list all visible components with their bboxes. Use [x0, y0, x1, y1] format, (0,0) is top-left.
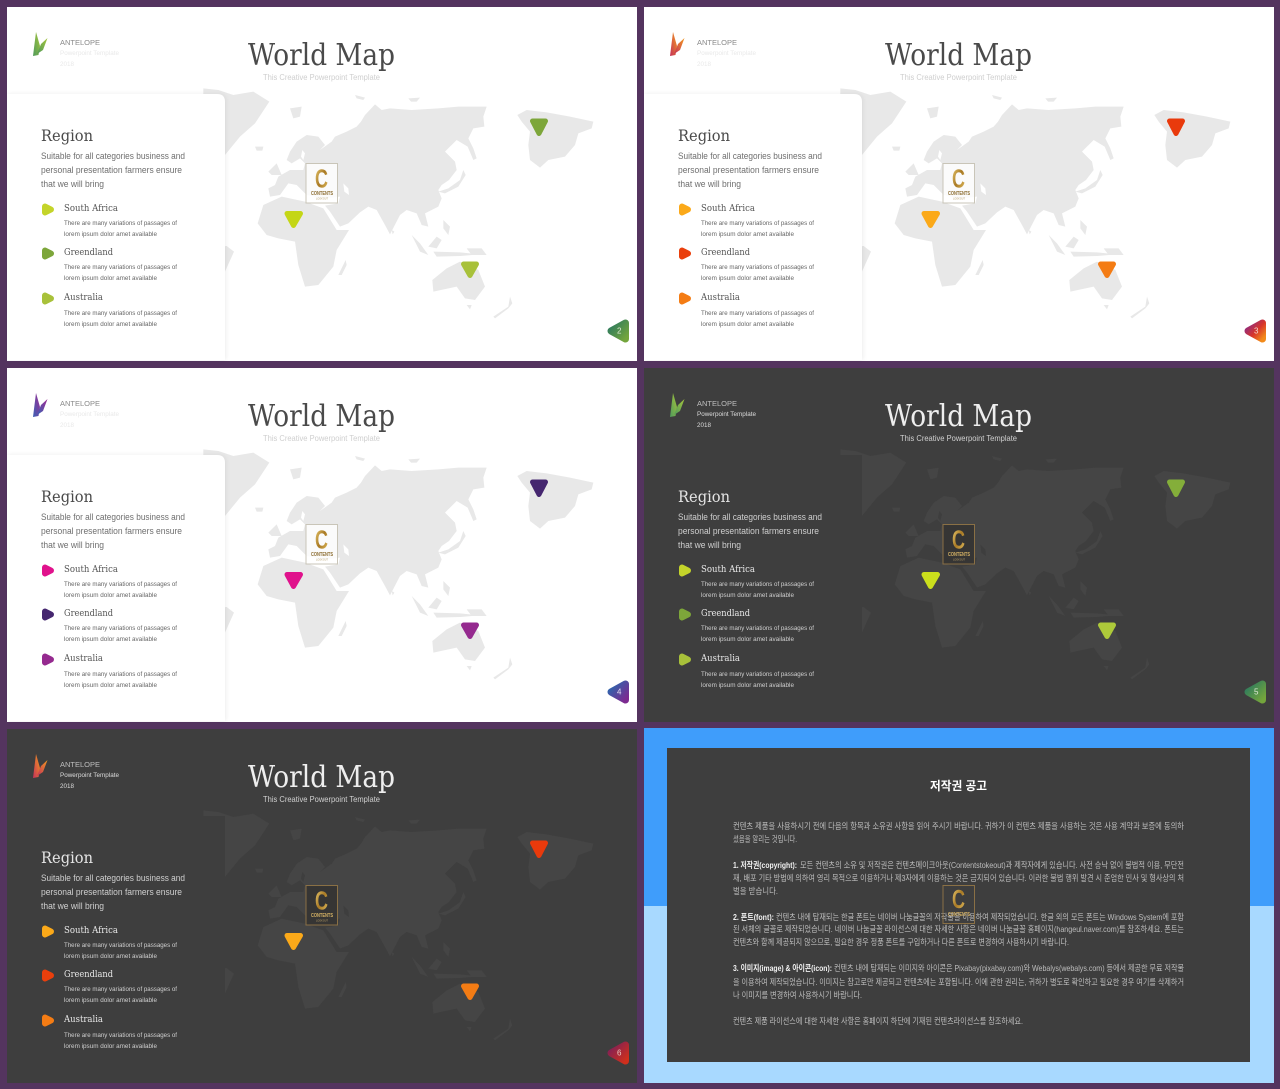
notice section: copyright: 1. 저작권(copyright): [733, 860, 797, 870]
map marker: Africa [924, 214, 938, 226]
world map [840, 449, 1230, 679]
brand text: 2018 [697, 61, 711, 68]
region heading: Region [678, 126, 730, 145]
map marker: Africa [924, 574, 938, 586]
region description: personal presentation farmers ensure [41, 526, 182, 536]
region description: that we will bring [678, 540, 741, 550]
legend: Greendland: lorem ipsum dolor amet available [64, 997, 157, 1004]
page number badge: 4 [617, 688, 622, 696]
region heading: Region [678, 487, 730, 506]
brand text: 2018 [697, 422, 711, 429]
legend: Australia: lorem ipsum dolor amet available [64, 321, 157, 328]
notice section: image and icon: 컨텐츠 내에 탑재되는 이미지와 아이콘은 Pixabay(pixabay.com)와 Webalys(webalys.com) 등에서 제공한 무료 저작물 [834, 963, 1184, 973]
brand text [697, 38, 756, 68]
page number badge [611, 684, 626, 700]
panel: slide 2 light green [7, 7, 637, 361]
logo watermark [306, 886, 338, 925]
legend: South Africa: lorem ipsum dolor amet available [701, 592, 794, 599]
logo watermark: CONTENTS [948, 912, 971, 918]
region description: Suitable for all categories business and [41, 512, 185, 522]
title: World Map [248, 38, 395, 73]
left region panel [7, 455, 225, 721]
brand text: Powerpoint Template [697, 411, 756, 418]
logo watermark: CONTENTS [311, 191, 334, 197]
brand text: 2018 [60, 783, 74, 790]
page number badge: 6 [617, 1048, 622, 1058]
legend: Greendland [45, 970, 177, 1004]
page number badge: 5 [1254, 688, 1259, 696]
world map [840, 88, 1230, 318]
legend: Australia: lorem ipsum dolor amet available [64, 682, 157, 689]
brand text [60, 760, 119, 790]
legend: South Africa: lorem ipsum dolor amet available [701, 231, 794, 238]
map marker: Australia [1100, 264, 1114, 276]
page number badge [1248, 684, 1262, 700]
legend: South Africa: There are many variations of passages of [701, 581, 814, 588]
legend: Australia: Australia [63, 654, 104, 664]
legend: South Africa [682, 204, 814, 238]
notice section: font: 컨텐츠 내에 탑재되는 한글 폰트는 네이버 나눔글꼴의 저작물을 이용하여 제작되었습니다. 한글 외의 모든 폰트는 Windows System에 포함 [776, 912, 1184, 922]
legend: Greendland [682, 248, 814, 282]
legend: South Africa: South Africa [64, 926, 119, 936]
legend: Greendland: There are many variations of passages of [64, 264, 177, 271]
brand text: ANTELOPE [697, 399, 737, 408]
panel: slide 3 light orange [644, 7, 1274, 361]
legend: South Africa: There are many variations of passages of [64, 942, 177, 949]
legend: Greendland: Greendland [64, 248, 113, 258]
legend: South Africa [45, 204, 177, 238]
notice heading: 저작권 공고 [930, 778, 987, 793]
legend: Australia [682, 293, 814, 328]
notice section: copyright: 재, 배포 기타 방법에 의하여 영리 목적으로 이용하거나 제3자에게 이용하는 것은 금지되어 있습니다. 이러한 불법 행위 발견 시 준엄한 민사 및 형사상의 처 [733, 873, 1184, 883]
logo watermark [306, 524, 338, 564]
panel: slide 6 dark orange [7, 729, 637, 1083]
logo watermark: C [952, 884, 965, 914]
legend: South Africa: lorem ipsum dolor amet available [64, 231, 157, 238]
subtitle: This Creative Powerpoint Template [900, 72, 1017, 82]
map marker: Russia [532, 121, 546, 134]
subtitle: This Creative Powerpoint Template [263, 794, 380, 804]
panel: copyright notice slide [644, 728, 1274, 1083]
logo watermark: C [315, 886, 328, 916]
brand text: ANTELOPE [60, 760, 100, 769]
legend: Australia: There are many variations of passages of [64, 671, 177, 678]
logo watermark: C [952, 524, 965, 554]
brand text: Powerpoint Template [697, 50, 756, 57]
brand text [60, 38, 119, 68]
logo watermark [943, 524, 974, 564]
light blue background lower [644, 906, 1274, 1083]
legend: Australia: Australia [63, 293, 104, 303]
left region panel [644, 94, 862, 360]
notice section: font: 컨텐츠와 함께 제공되지 않으므로, 필요한 경우 정품 폰트를 구입하거나 다른 폰트로 변경하여 사용하시기 바랍니다. [733, 937, 1069, 947]
legend: Australia: There are many variations of passages of [64, 310, 177, 317]
brand text: Powerpoint Template [60, 411, 119, 418]
legend: Greendland: There are many variations of passages of [64, 625, 177, 632]
legend: South Africa: There are many variations of passages of [64, 220, 177, 227]
legend: Greendland [45, 248, 177, 282]
notice section: copyright [733, 860, 1184, 896]
logo watermark: LOOKOUT [316, 558, 328, 562]
title: World Map [885, 38, 1032, 73]
region description [41, 873, 185, 911]
legend: Greendland: Greendland [64, 609, 113, 619]
brand text: 2018 [60, 61, 74, 68]
subtitle: This Creative Powerpoint Template [263, 433, 380, 443]
world map [203, 88, 593, 318]
page number badge: 3 [1254, 326, 1259, 336]
region description: Suitable for all categories business and [41, 873, 185, 883]
region description [678, 512, 822, 550]
notice section: font: 된 서체의 글꼴로 제작되었습니다. 네이버 나눔글꼴 라이선스에 대한 자세한 사항은 네이버 나눔글꼴 홈페이지(hangeul.naver.com)를 참조하세요. 폰트는 [733, 924, 1184, 934]
region description: personal presentation farmers ensure [41, 887, 182, 897]
region description: Suitable for all categories business and [678, 512, 822, 522]
legend: South Africa [45, 565, 177, 599]
notice section: copyright: 벌을 받습니다. [733, 886, 778, 896]
region description: that we will bring [678, 179, 741, 189]
panel: slide 4 light magenta [7, 368, 637, 722]
region description: personal presentation farmers ensure [678, 165, 819, 175]
legend: South Africa: There are many variations of passages of [64, 581, 177, 588]
region description: personal presentation farmers ensure [678, 526, 819, 536]
brand text [60, 399, 119, 429]
notice section: font [733, 912, 1184, 947]
logo watermark: LOOKOUT [953, 196, 965, 200]
page number badge: 2 [617, 326, 622, 336]
legend: South Africa: South Africa [64, 204, 119, 214]
left region panel [7, 94, 225, 360]
region description: that we will bring [41, 901, 104, 911]
logo watermark: C [315, 524, 328, 554]
brand logo [670, 32, 684, 56]
region description: that we will bring [41, 540, 104, 550]
logo watermark: LOOKOUT [316, 918, 328, 922]
map marker: Russia [532, 482, 546, 494]
legend: South Africa: There are many variations of passages of [701, 220, 814, 227]
brand logo [33, 393, 48, 417]
legend: Greendland: lorem ipsum dolor amet available [64, 275, 157, 282]
map marker: Russia [1170, 482, 1182, 494]
region description: that we will bring [41, 179, 104, 189]
map marker: Australia [1100, 625, 1114, 636]
legend: Greendland: lorem ipsum dolor amet available [701, 636, 794, 643]
logo watermark: CONTENTS [311, 552, 334, 558]
legend: Greendland: lorem ipsum dolor amet available [64, 636, 157, 643]
map marker: Russia [532, 843, 546, 856]
legend: Greendland: There are many variations of passages of [701, 264, 814, 271]
legend: South Africa [682, 565, 814, 599]
logo watermark [943, 884, 974, 924]
world map [203, 449, 593, 679]
logo watermark: LOOKOUT [953, 558, 965, 562]
legend: South Africa: South Africa [701, 565, 756, 575]
notice intro: 컨텐츠 제품을 사용하시기 전에 다음의 항목과 소유권 사항을 읽어 주시기 바랍니다. 귀하가 이 컨텐츠 제품을 사용하는 것은 사용 계약과 보증에 동의하 [733, 821, 1184, 831]
brand text [697, 399, 756, 429]
legend: Australia: lorem ipsum dolor amet available [701, 682, 794, 689]
notice section: image and icon: 을 이용하여 제작되었습니다. 이미지는 참고로만 제공되고 컨텐츠에는 포함됩니다. 이에 관한 권리는, 귀하가 별도로 확인하고 필요한 경우 여기를 삭제하거 [733, 977, 1184, 987]
legend: South Africa: South Africa [701, 204, 756, 214]
legend: Greendland: There are many variations of passages of [64, 986, 177, 993]
left region panel [7, 816, 225, 1082]
brand logo [670, 393, 684, 417]
legend: South Africa: lorem ipsum dolor amet available [64, 953, 157, 960]
brand text: ANTELOPE [697, 38, 737, 47]
notice section: copyright: 모든 컨텐츠의 소유 및 저작권은 컨텐츠메이크아웃(Contentstokeout)과 제작자에게 있습니다. 사전 승낙 없이 불법적 이용, 무단전 [800, 860, 1184, 870]
brand logo [33, 32, 48, 56]
region description [41, 151, 185, 189]
legend: Australia: lorem ipsum dolor amet available [701, 321, 794, 328]
map marker: Africa [287, 574, 300, 586]
title: World Map [248, 399, 395, 434]
logo watermark: LOOKOUT [316, 196, 328, 200]
legend: Australia: Australia [700, 654, 741, 664]
legend: Greendland [682, 609, 814, 643]
legend: Australia: There are many variations of passages of [701, 671, 814, 678]
logo watermark: C [315, 164, 328, 194]
logo watermark: CONTENTS [311, 913, 334, 919]
brand text: ANTELOPE [60, 38, 100, 47]
legend: Australia [682, 654, 814, 689]
region description [678, 151, 822, 189]
map marker: Australia [464, 986, 476, 998]
legend: Australia: Australia [63, 1015, 104, 1025]
legend: Australia: Australia [700, 293, 741, 303]
region description [41, 512, 185, 550]
region heading: Region [41, 487, 93, 506]
region heading: Region [41, 126, 93, 145]
notice intro [733, 821, 1184, 844]
subtitle: This Creative Powerpoint Template [900, 433, 1017, 443]
brand text: Powerpoint Template [60, 50, 119, 57]
map marker: Australia [464, 264, 476, 276]
notice section: image and icon: 3. 이미지(image) & 아이콘(icon): [733, 963, 832, 973]
legend: Greendland: Greendland [701, 248, 750, 258]
left region panel [644, 455, 862, 721]
blue background upper [644, 728, 1274, 906]
brand text: Powerpoint Template [60, 772, 119, 779]
legend: Greendland: Greendland [701, 609, 750, 619]
legend: Australia: There are many variations of passages of [701, 310, 814, 317]
region heading: Region [41, 848, 93, 867]
world map [203, 810, 593, 1040]
logo watermark: CONTENTS [948, 191, 971, 197]
map marker: Africa [287, 214, 300, 226]
legend: Australia: There are many variations of passages of [64, 1032, 177, 1039]
page number badge [611, 323, 626, 339]
map marker: Russia [1170, 121, 1182, 134]
logo watermark: C [952, 164, 965, 194]
notice section: image and icon: 나 이미지를 변경하여 사용하시기 바랍니다. [733, 990, 862, 1000]
dark notice card [667, 748, 1250, 1062]
map marker: Australia [464, 625, 476, 636]
legend: Greendland [45, 609, 177, 643]
logo watermark: CONTENTS [948, 552, 971, 558]
page number badge [1248, 323, 1262, 339]
title: World Map [885, 399, 1032, 434]
brand text: ANTELOPE [60, 399, 100, 408]
brand logo [33, 754, 48, 778]
subtitle: This Creative Powerpoint Template [263, 72, 380, 82]
notice intro: 셨음을 알리는 것입니다. [733, 834, 797, 844]
region description: personal presentation farmers ensure [41, 165, 182, 175]
legend: Greendland: Greendland [64, 970, 113, 980]
map marker: Africa [287, 936, 300, 948]
panel: slide 5 dark green [644, 368, 1274, 722]
title: World Map [248, 760, 395, 795]
notice section: image and icon [733, 963, 1184, 1000]
logo watermark [306, 164, 338, 203]
notice footer: 컨텐츠 제품 라이선스에 대한 자세한 사항은 홈페이지 하단에 기재된 컨텐츠라이선스를 참조하세요. [733, 1016, 1023, 1026]
logo watermark [943, 164, 974, 203]
page number badge [611, 1045, 626, 1061]
region description: Suitable for all categories business and [678, 151, 822, 161]
legend: Australia [45, 293, 177, 328]
legend: Greendland: lorem ipsum dolor amet available [701, 275, 794, 282]
legend: Australia: lorem ipsum dolor amet available [64, 1043, 157, 1050]
brand text: 2018 [60, 422, 74, 429]
region description: Suitable for all categories business and [41, 151, 185, 161]
legend: Greendland: There are many variations of passages of [701, 625, 814, 632]
legend: South Africa [45, 926, 177, 960]
legend: South Africa: lorem ipsum dolor amet available [64, 592, 157, 599]
legend: Australia [45, 1015, 177, 1050]
notice section: font: 2. 폰트(font): [733, 912, 774, 922]
legend: South Africa: South Africa [64, 565, 119, 575]
legend: Australia [45, 654, 177, 689]
